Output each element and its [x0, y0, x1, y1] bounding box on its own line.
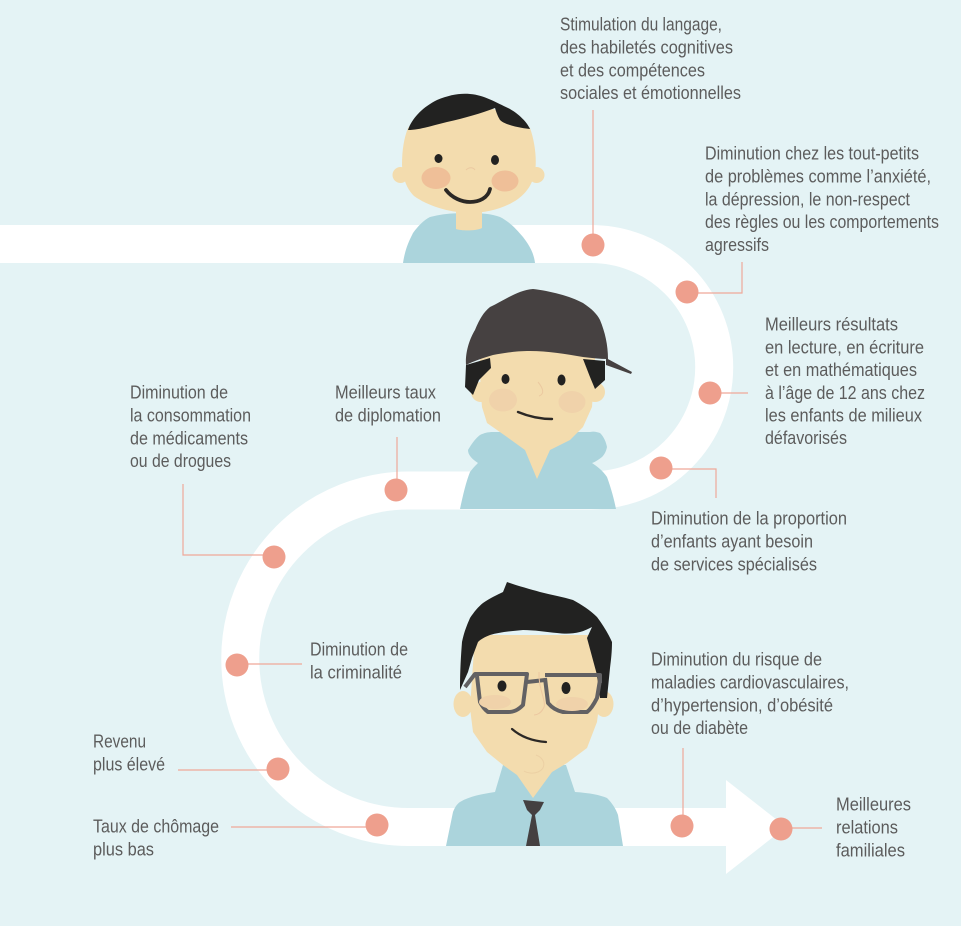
text: better school results: [765, 315, 925, 448]
text: cardiovascular risk: ou de diabète: [651, 718, 748, 738]
text: cardiovascular risk: d’hypertension, d’obésité: [651, 695, 833, 715]
text: better school results: les enfants de milieux: [765, 405, 922, 425]
text: reduced problems in toddlers: de problèmes comme l’anxiété,: [705, 167, 931, 187]
text: drug consumption: ou de drogues: [130, 451, 231, 471]
text: lower unemployment: [93, 817, 219, 860]
text: better school results: en lecture, en écriture: [765, 337, 924, 357]
text: higher income: Revenu: [93, 732, 146, 752]
text: better school results: défavorisés: [765, 428, 847, 448]
text: reduced problems in toddlers: agressifs: [705, 235, 769, 255]
text: reduced problems in toddlers: la dépression, le non-respect: [705, 189, 910, 209]
text: family relations: Meilleures: [836, 795, 911, 815]
cap brim: [606, 358, 632, 374]
text: graduation rates: [335, 383, 441, 426]
text: better school results: et en mathématiques: [765, 360, 917, 380]
benefit markers: [226, 234, 792, 840]
text: lower unemployment: Taux de chômage: [93, 817, 219, 837]
text: higher income: plus élevé: [93, 755, 165, 775]
adult hair: [460, 582, 612, 698]
text: drug consumption: de médicaments: [130, 428, 248, 448]
text: criminality: [310, 640, 408, 683]
text: family relations: relations: [836, 817, 898, 837]
text: language stimulation: sociales et émotionnelles: [560, 83, 741, 103]
illustration: teenager with cap: [460, 289, 632, 509]
text: cardiovascular risk: [651, 650, 849, 738]
text: drug consumption: la consommation: [130, 405, 251, 425]
text: reduced problems in toddlers: Diminution chez les tout-petits: [705, 144, 919, 164]
text: language stimulation: des habiletés cognitives: [560, 37, 733, 57]
text: cardiovascular risk: maladies cardiovasculaires,: [651, 672, 849, 692]
text: fewer specialised services: Diminution de la proportion: [651, 509, 847, 529]
text: fewer specialised services: d’enfants ayant besoin: [651, 531, 813, 551]
text: family relations: familiales: [836, 840, 905, 860]
text: higher income: [93, 732, 165, 775]
text: language stimulation: Stimulation du langage,: [560, 15, 722, 35]
winding white path with arrow: [0, 244, 786, 874]
text: family relations: [836, 795, 911, 860]
text: graduation rates: de diplomation: [335, 405, 441, 425]
text: drug consumption: Diminution de: [130, 383, 228, 403]
connector lines: [178, 110, 822, 828]
text: fewer specialised services: de services spécialisés: [651, 554, 817, 574]
text: better school results: à l’âge de 12 ans chez: [765, 383, 925, 403]
child hair: [408, 94, 530, 130]
text: language stimulation: [560, 15, 741, 103]
text: reduced problems in toddlers: [705, 144, 939, 255]
illustration: adult with glasses and tie: [446, 582, 623, 846]
glasses: [465, 674, 600, 712]
text: drug consumption: [130, 383, 251, 471]
necktie: [523, 800, 544, 846]
text: cardiovascular risk: Diminution du risque de: [651, 650, 822, 670]
text: better school results: Meilleurs résultats: [765, 315, 898, 335]
text: criminality: la criminalité: [310, 663, 402, 683]
text: language stimulation: et des compétences: [560, 60, 705, 80]
text: lower unemployment: plus bas: [93, 840, 154, 860]
text: graduation rates: Meilleurs taux: [335, 383, 436, 403]
text: fewer specialised services: [651, 509, 847, 574]
text: criminality: Diminution de: [310, 640, 408, 660]
illustration: young child: [392, 94, 544, 263]
